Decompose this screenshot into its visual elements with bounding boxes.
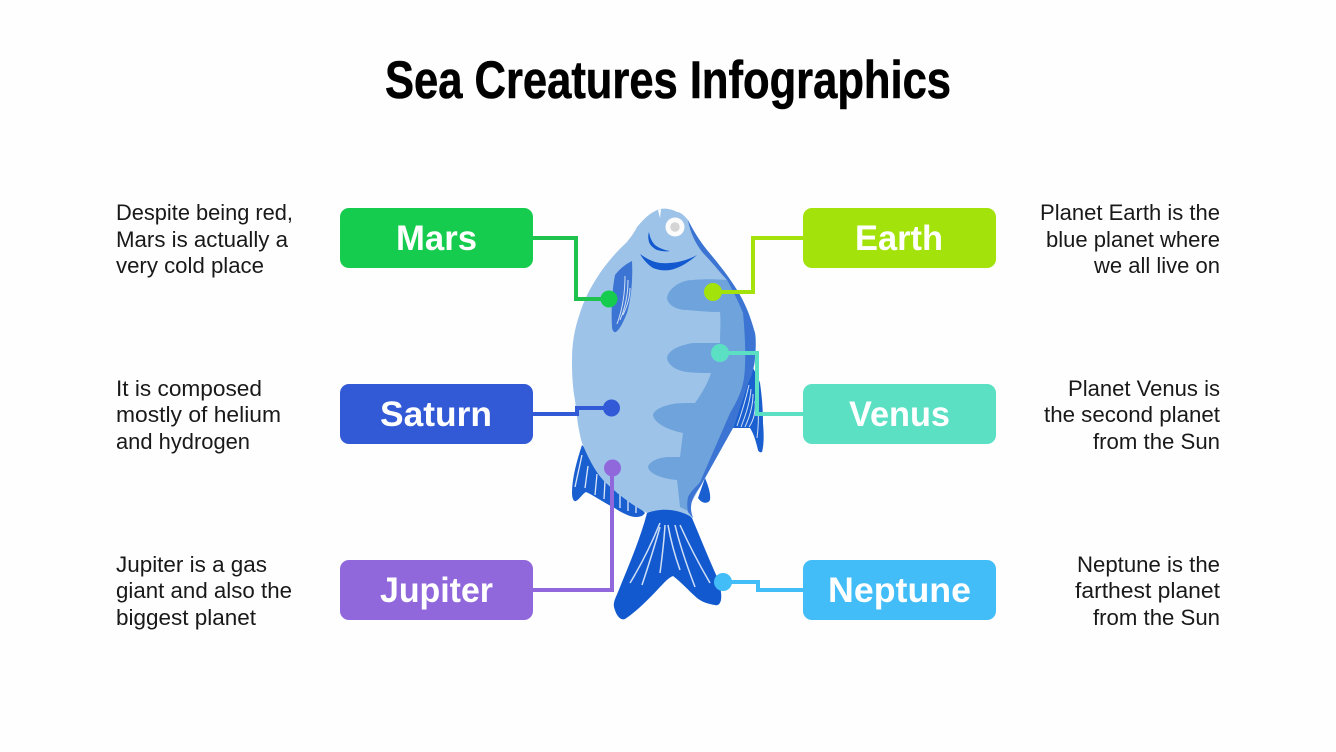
connector: Neptune bbox=[714, 573, 803, 591]
label: Jupiter: Jupiter bbox=[380, 571, 493, 610]
fish gill bbox=[648, 232, 670, 251]
fish eye bbox=[666, 218, 684, 236]
connector: Venus bbox=[711, 344, 803, 414]
text: Mars description bbox=[116, 200, 293, 278]
text: Earth description: Planet Earth is the bbox=[1040, 200, 1220, 225]
text: Jupiter description: Jupiter is a gas bbox=[116, 552, 267, 577]
label: Neptune: Neptune bbox=[828, 571, 971, 610]
fish left fin rays bbox=[575, 455, 636, 513]
text: Earth description: blue planet where bbox=[1046, 227, 1220, 252]
text: Earth description: we all live on bbox=[1093, 253, 1220, 278]
text: Venus description: the second planet bbox=[1044, 402, 1220, 427]
fish pectoral fin rays bbox=[617, 276, 630, 324]
text: Mars description: very cold place bbox=[116, 253, 264, 278]
fish left fin bbox=[572, 445, 645, 517]
fish body bbox=[572, 209, 756, 518]
text: Mars description: Mars is actually a bbox=[116, 227, 289, 252]
connector: Jupiter bbox=[533, 460, 621, 590]
label: Earth: Earth bbox=[855, 219, 943, 258]
text: Venus description bbox=[1044, 376, 1220, 454]
fish tail rays bbox=[630, 523, 710, 587]
title: Sea Creatures Infographics bbox=[385, 51, 951, 110]
label: Venus: Venus bbox=[849, 395, 950, 434]
text: Venus description: Planet Venus is bbox=[1068, 376, 1220, 401]
text: Neptune description: from the Sun bbox=[1093, 605, 1220, 630]
text: Jupiter description: giant and also the bbox=[116, 578, 292, 603]
text: Mars description: Despite being red, bbox=[116, 200, 293, 225]
text: Earth description bbox=[1040, 200, 1220, 278]
label: Mars bbox=[340, 208, 533, 268]
label: Earth bbox=[803, 208, 996, 268]
fish right fin bbox=[731, 368, 764, 452]
text: Saturn description: and hydrogen bbox=[116, 429, 250, 454]
label: Jupiter bbox=[340, 560, 533, 620]
text: Jupiter description bbox=[116, 552, 292, 630]
text: Saturn description: It is composed bbox=[116, 376, 262, 401]
text: Neptune description: farthest planet bbox=[1075, 578, 1220, 603]
text: Neptune description bbox=[1075, 552, 1220, 630]
fish mouth bbox=[640, 254, 697, 270]
connector: Saturn bbox=[533, 400, 620, 416]
fish tail bbox=[614, 508, 721, 619]
fish lower small fin bbox=[698, 478, 710, 503]
text: Saturn description: mostly of helium bbox=[116, 402, 281, 427]
illustration: fish bbox=[572, 209, 764, 619]
connector: Earth bbox=[704, 238, 803, 301]
text: Venus description: from the Sun bbox=[1093, 429, 1220, 454]
label: Saturn bbox=[340, 384, 533, 444]
label: Venus bbox=[803, 384, 996, 444]
fish right fin rays bbox=[737, 385, 758, 438]
fish pupil bbox=[670, 222, 680, 232]
label: Mars: Mars bbox=[396, 219, 477, 258]
text: Saturn description bbox=[116, 376, 281, 454]
text: Neptune description: Neptune is the bbox=[1077, 552, 1220, 577]
connector: Mars bbox=[533, 238, 618, 308]
fish pectoral fin bbox=[612, 261, 632, 332]
label: Neptune bbox=[803, 560, 996, 620]
fish back shading bbox=[648, 279, 746, 511]
text: Jupiter description: biggest planet bbox=[116, 605, 256, 630]
fish dark back edge bbox=[687, 220, 756, 518]
fish nostril notch bbox=[658, 209, 661, 218]
label: Saturn: Saturn bbox=[380, 395, 492, 434]
